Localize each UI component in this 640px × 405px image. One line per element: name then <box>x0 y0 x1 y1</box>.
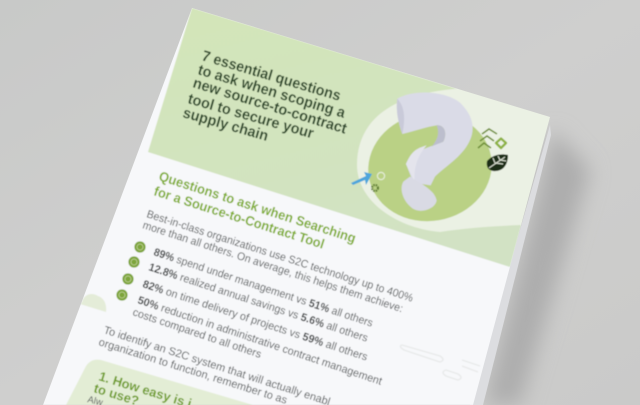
icon: chevrons <box>478 129 497 148</box>
panel: green header <box>148 8 550 267</box>
bullet list: 50% reduction in administrative contract management <box>136 294 383 388</box>
icon: diamond flower <box>496 138 506 148</box>
bullet list <box>131 246 383 388</box>
icon: question mark <box>397 93 473 211</box>
decorative cloud left <box>80 294 106 312</box>
title: tool to secure your <box>186 90 316 142</box>
icon: small ring <box>377 172 385 180</box>
bullet list: 12.8% realized annual savings vs 5.6% all others <box>147 261 370 345</box>
icon: arrow <box>351 172 372 185</box>
intro text: more than all others. On average, this helps them achieve: <box>141 219 404 315</box>
decorative cloud outlines right <box>400 345 480 380</box>
bullet icons <box>116 241 146 301</box>
bullet list: costs compared to all others <box>131 306 263 361</box>
panel: pale corner behind circle <box>357 88 552 232</box>
title: new source-to-contract <box>191 75 349 138</box>
title: to ask when scoping a <box>196 62 348 122</box>
page shadow <box>485 130 590 405</box>
heading: questions to ask: for a Source-to-Contract Tool <box>152 184 326 252</box>
bullet list: 89% spend under management vs 51% all others <box>152 246 375 330</box>
title: supply chain <box>181 104 270 145</box>
icon: gear <box>372 185 378 191</box>
heading: questions to ask: Questions to ask when Searching <box>157 169 358 246</box>
title <box>181 48 349 145</box>
panel: question 1 card <box>66 360 253 405</box>
green circle <box>368 122 492 222</box>
page stack edge <box>470 125 551 405</box>
body text: organization to function, remember to as <box>97 336 289 405</box>
document page <box>43 8 550 405</box>
title: 7 essential questions <box>200 48 343 105</box>
icon: leaf <box>487 154 508 171</box>
intro text: Best-in-class organizations use S2C technology up to 400% <box>145 208 415 305</box>
bullet list: 82% on time delivery of projects vs 59% all others <box>141 278 369 364</box>
